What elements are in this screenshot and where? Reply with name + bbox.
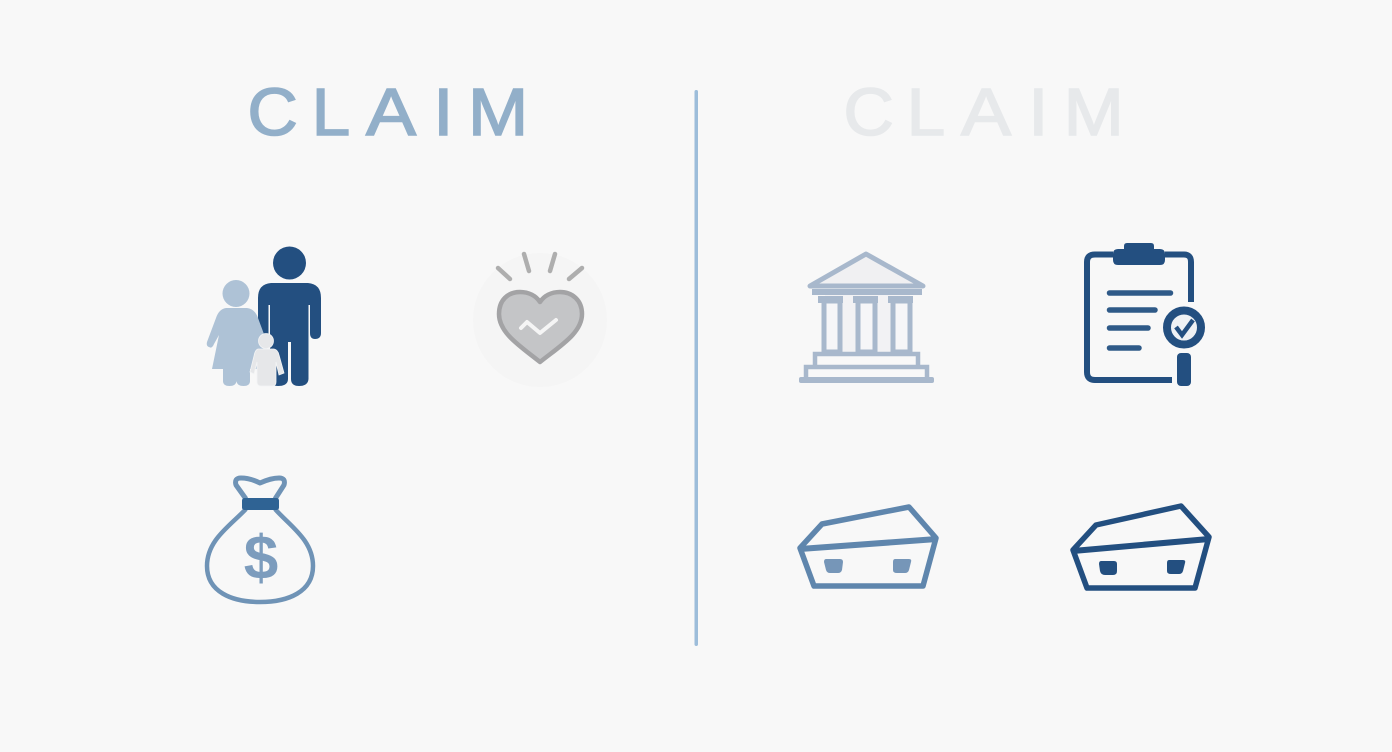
pediment — [810, 254, 923, 286]
bag knot — [236, 478, 284, 499]
left heading: CLAIM: L — [312, 75, 350, 150]
left heading: CLAIM — [248, 74, 528, 150]
icon: coffin light — [800, 507, 937, 586]
pulse line — [521, 320, 556, 333]
magnifier handle — [1177, 353, 1191, 386]
left heading: CLAIM: C — [248, 75, 298, 150]
dollar sign: $ — [244, 524, 278, 593]
board — [1087, 254, 1191, 380]
heart — [499, 292, 582, 362]
handles — [824, 559, 843, 573]
columns — [824, 301, 910, 352]
clip — [1113, 243, 1165, 265]
vertical divider — [694, 90, 698, 646]
bag band — [242, 498, 279, 510]
man — [258, 246, 321, 386]
right heading: CLAIM (faded): L — [907, 75, 945, 150]
icon: coffin dark — [1073, 506, 1209, 588]
text lines — [1110, 293, 1170, 348]
icon: bank building — [799, 254, 934, 383]
icon: money bag — [207, 478, 313, 602]
right heading: CLAIM (faded): C — [844, 75, 894, 150]
magnifier lens — [1167, 310, 1201, 344]
left heading: CLAIM: A — [366, 76, 417, 150]
right heading: CLAIM (faded): A — [961, 76, 1012, 150]
rays — [498, 254, 582, 279]
right heading: CLAIM (faded): M — [1064, 74, 1124, 149]
icon: clipboard with magnifier — [1087, 243, 1201, 386]
left heading: CLAIM: M — [468, 74, 528, 149]
bag outline — [207, 509, 313, 602]
woman — [207, 280, 268, 386]
child — [250, 334, 284, 386]
right heading: CLAIM (faded) — [844, 74, 1124, 150]
handles — [1099, 561, 1117, 575]
steps — [806, 354, 927, 380]
interior backdrop — [825, 295, 910, 353]
icon: heart with pulse — [473, 253, 607, 387]
check mark — [1176, 320, 1193, 335]
right heading: CLAIM (faded): I — [1028, 74, 1048, 149]
left heading: CLAIM: I — [433, 74, 453, 149]
icon: family — [207, 246, 321, 386]
